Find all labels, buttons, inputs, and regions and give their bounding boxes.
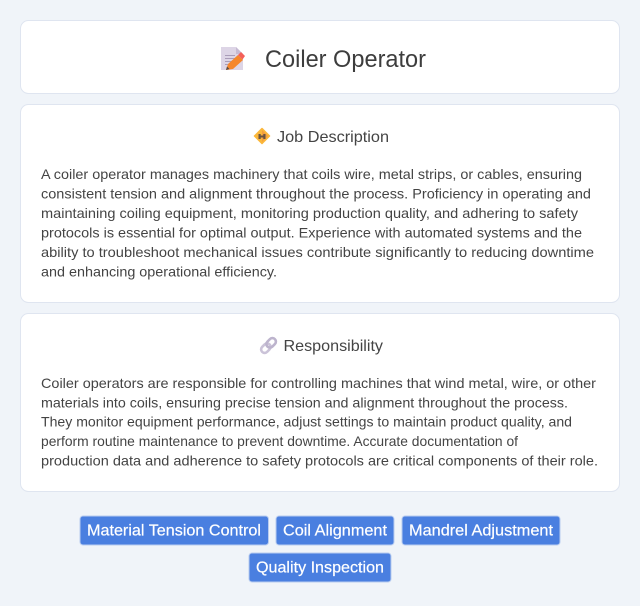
heading: job description: Job Description xyxy=(277,129,389,146)
text block: job description: A coiler operator manages machinery that coils wire, metal strips, or cables, ensuring xyxy=(41,166,582,182)
text block: responsibility: production data and adherence to safety protocols are critical components of their role. xyxy=(41,452,598,468)
heading: responsibility: Responsibility xyxy=(284,338,383,355)
text block: responsibility: They monitor equipment performance, adjust settings to maintain product quality, and xyxy=(41,414,572,430)
text block: job description: and enhancing operational efficiency. xyxy=(41,264,277,280)
panel: header xyxy=(20,20,620,94)
icon: diamond road sign xyxy=(254,128,270,144)
tag: material tension control xyxy=(80,516,268,545)
text block: job description: maintaining coiling equipment, monitoring production quality, and adhering to safety xyxy=(41,205,578,221)
tag: mandrel adjustment xyxy=(402,516,560,545)
tag: coil alignment: Coil Alignment xyxy=(283,522,388,540)
text block: job description: consistent tension and alignment throughout the process. Proficiency in operating and xyxy=(41,186,591,202)
text block: job description: protocols is essential for optimal output. Experience with automated systems and the xyxy=(41,224,582,240)
panel: responsibility xyxy=(20,314,620,492)
tag: quality inspection xyxy=(249,553,391,582)
tag: material tension control: Material Tension Control xyxy=(87,522,261,540)
text block: job description: ability to troubleshoot mechanical issues contribute significantly to reducing downtime xyxy=(41,244,594,260)
text block: responsibility: Coiler operators are responsible for controlling machines that wind metal, wire, or other xyxy=(41,375,596,391)
text block: responsibility: perform routine maintenance to prevent downtime. Accurate documentation of xyxy=(41,433,518,449)
tag: mandrel adjustment: Mandrel Adjustment xyxy=(409,522,554,540)
tag: coil alignment xyxy=(276,516,394,545)
title: Coiler Operator xyxy=(265,46,426,73)
icon: memo with pencil xyxy=(221,47,245,70)
panel: job description xyxy=(20,104,620,302)
text block: responsibility: materials into coils, ensuring precise tension and alignment throughout the process. xyxy=(41,394,568,410)
text block: job description xyxy=(41,166,594,280)
text block: responsibility xyxy=(41,375,598,468)
icon: chain link xyxy=(260,337,277,354)
tag: quality inspection: Quality Inspection xyxy=(256,560,384,576)
